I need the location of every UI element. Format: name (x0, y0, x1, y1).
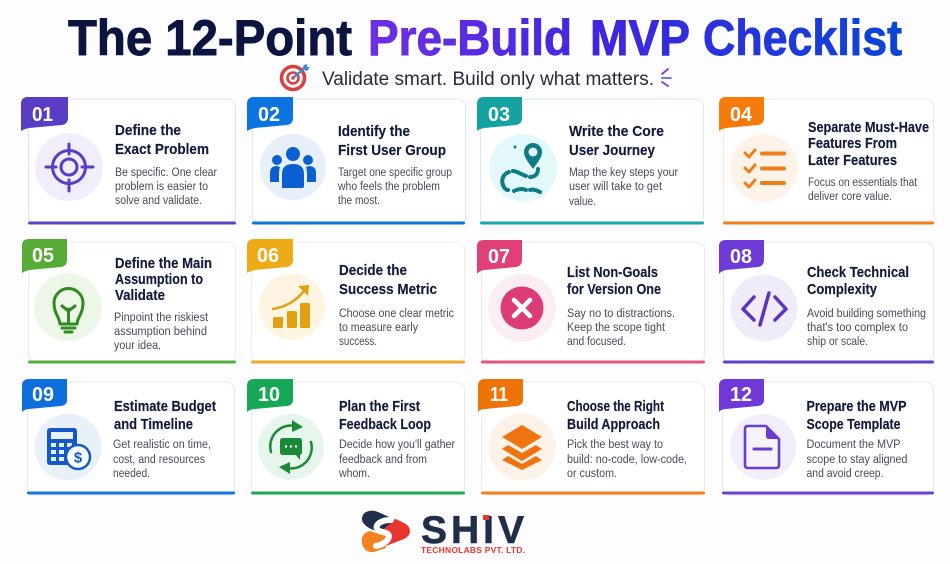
badge 02: 02 (258, 104, 280, 126)
icon: growth chart (259, 274, 325, 340)
panel: card 12 (719, 379, 934, 495)
logo tagline: TECHNOLABS PVT. LTD. (421, 545, 525, 555)
heading 07 (567, 264, 661, 298)
badge 04: 04 (730, 104, 753, 126)
text 08 (807, 308, 926, 348)
text 08: ship or scale. (807, 336, 868, 348)
heading 10: Feedback Loop (339, 416, 431, 433)
text 10: feedback and from (339, 454, 427, 466)
badge 12 (719, 379, 764, 412)
text 12: Document the MVP (806, 439, 901, 451)
icon: checklist (730, 134, 798, 202)
text 08: Avoid building something (807, 308, 926, 320)
heading 11: Choose the Right (567, 398, 664, 415)
badge 03: 03 (488, 104, 510, 126)
badge 11: 11 (490, 384, 508, 406)
panel: card 02 (247, 97, 466, 224)
icon: document (730, 414, 796, 480)
heading 09 (114, 398, 216, 433)
title: Checklist (703, 10, 902, 66)
text 12: and avoid creep. (806, 468, 884, 480)
text 03 (569, 167, 678, 208)
text 11: build: no-code, low-code, (567, 454, 687, 466)
heading 01: Define the (115, 122, 181, 139)
heading 08 (807, 264, 909, 298)
heading 05: Define the Main (115, 255, 212, 272)
heading 11: Build Approach (567, 416, 660, 433)
heading 10: Plan the First (339, 398, 420, 415)
text 06: success. (339, 336, 377, 348)
heading 06 (339, 262, 437, 298)
text 02: who feels the problem (337, 181, 440, 193)
icon: stacked layers (488, 414, 556, 480)
heading 04: Features From (808, 135, 897, 152)
text 05: your idea. (114, 340, 161, 352)
text 08: that's too complex to (807, 322, 908, 334)
heading 04 (808, 119, 929, 169)
text 11 (567, 439, 687, 480)
heading 04: Later Features (808, 152, 897, 169)
badge 07: 07 (488, 246, 510, 268)
text 06: Choose one clear metric (339, 308, 454, 320)
panel: card 10 (247, 379, 465, 495)
logo accent (483, 515, 489, 520)
badge 01: 01 (32, 104, 53, 126)
logo mark (362, 511, 410, 552)
icon: journey map pin (489, 134, 557, 202)
text 02: Target one specific group (338, 167, 452, 179)
badge 12: 12 (730, 384, 752, 406)
badge 05 (22, 239, 67, 273)
heading 05: Validate (115, 287, 165, 304)
heading 10 (339, 398, 431, 433)
text 07: Say no to distractions. (567, 308, 675, 320)
text 04: deliver core value. (808, 191, 892, 203)
heading 08: Check Technical (807, 264, 909, 281)
title: Pre-Build (368, 10, 572, 66)
text 05 (114, 312, 209, 352)
title (68, 10, 902, 66)
heading 05 (115, 255, 212, 304)
heading 06: Success Metric (339, 281, 437, 298)
heading 07: for Version One (567, 281, 661, 298)
heading 02 (338, 123, 446, 159)
logo: Shiv Technolabs (362, 509, 525, 555)
heading 01 (115, 122, 209, 158)
panel: card 07 (477, 240, 705, 364)
text 07: and focused. (567, 336, 626, 348)
heading 03: Write the Core (569, 123, 664, 140)
text 05: assumption behind (114, 326, 207, 338)
badge 11 (478, 379, 523, 412)
panel: card 03 (477, 97, 704, 224)
panel: card 09 (22, 379, 235, 495)
badge 07 (477, 240, 522, 274)
badge 02 (247, 97, 293, 131)
heading 04: Separate Must-Have (808, 119, 929, 136)
heading 03 (569, 123, 664, 159)
text 09 (113, 439, 211, 480)
text 05: Pinpoint the riskiest (114, 312, 209, 324)
panel: card 06 (247, 239, 465, 364)
heading 02: Identify the (338, 123, 410, 140)
icon: light bulb (34, 273, 102, 341)
heading 06: Decide the (339, 262, 407, 279)
badge 10 (247, 379, 293, 412)
text 04 (808, 177, 918, 203)
badge 05: 05 (32, 245, 54, 267)
logo wordmark: SHIV (421, 509, 524, 552)
panel: card 11 (478, 379, 705, 495)
icon: code brackets (730, 274, 798, 342)
heading 05: Assumption to (115, 271, 203, 288)
text 09: needed. (113, 468, 150, 480)
text 10: whom. (338, 468, 370, 480)
text 11: Pick the best way to (567, 439, 663, 451)
title: The 12-Point (68, 10, 352, 66)
panel: card 04 (719, 97, 934, 224)
badge 03 (477, 97, 522, 131)
panel: card 08 (719, 240, 934, 364)
text 11: or custom. (567, 468, 617, 480)
badge 08: 08 (730, 246, 752, 268)
text 06: to measure early (339, 322, 418, 334)
heading 02: First User Group (338, 142, 446, 159)
text 03: user will take to get (569, 181, 663, 193)
text 03: Map the key steps your (569, 167, 678, 179)
badge 06 (247, 239, 293, 273)
text 04: Focus on essentials that (808, 177, 918, 189)
text 01: problem is easier to (115, 181, 208, 193)
heading 01: Exact Problem (115, 141, 209, 158)
badge 09: 09 (32, 384, 54, 406)
badge 01 (21, 97, 68, 131)
icon: feedback loop (258, 414, 324, 480)
badge 06: 06 (257, 245, 279, 267)
heading 11 (567, 398, 664, 433)
text 03: value. (569, 196, 596, 208)
heading 12: Prepare the MVP (806, 398, 906, 415)
text 12 (806, 439, 908, 480)
heading 08: Complexity (807, 281, 878, 298)
text 01: Be specific. One clear (115, 167, 217, 179)
icon: sparks (662, 69, 671, 86)
text 07: Keep the scope tight (567, 322, 666, 334)
text 06 (339, 308, 454, 348)
badge 08 (719, 240, 764, 274)
text 10: Decide how you'll gather (339, 439, 455, 451)
text 01: solve and validate. (115, 195, 202, 207)
text 09: cost, and resources (113, 454, 205, 466)
icon: target with arrow (282, 64, 310, 90)
icon: user group (260, 134, 326, 200)
text 09: Get realistic on time, (113, 439, 211, 451)
badge 04 (719, 97, 764, 131)
badge 10: 10 (258, 384, 280, 406)
icon: calculator and dollar coin (34, 414, 102, 480)
title: MVP (590, 10, 690, 66)
icon: crosshair target (35, 133, 103, 201)
text 07 (567, 308, 675, 348)
panel: card 05 (22, 239, 236, 364)
text 02: the most. (338, 195, 380, 207)
heading 09: and Timeline (114, 416, 193, 433)
text 02 (337, 167, 452, 207)
heading 12: Scope Template (806, 416, 900, 433)
heading 09: Estimate Budget (114, 398, 216, 415)
text 01 (115, 167, 217, 207)
icon: cross circle (488, 274, 556, 342)
panel: card 01 (21, 97, 236, 224)
heading 12 (806, 398, 906, 433)
text 12: scope to stay aligned (806, 454, 908, 466)
heading 03: User Journey (569, 142, 656, 159)
subtitle: Validate smart. Build only what matters. (322, 69, 654, 90)
icon: calculator and dollar coin: $ (74, 450, 83, 466)
badge 09 (22, 379, 67, 412)
heading 07: List Non-Goals (567, 264, 658, 281)
text 10 (338, 439, 455, 480)
